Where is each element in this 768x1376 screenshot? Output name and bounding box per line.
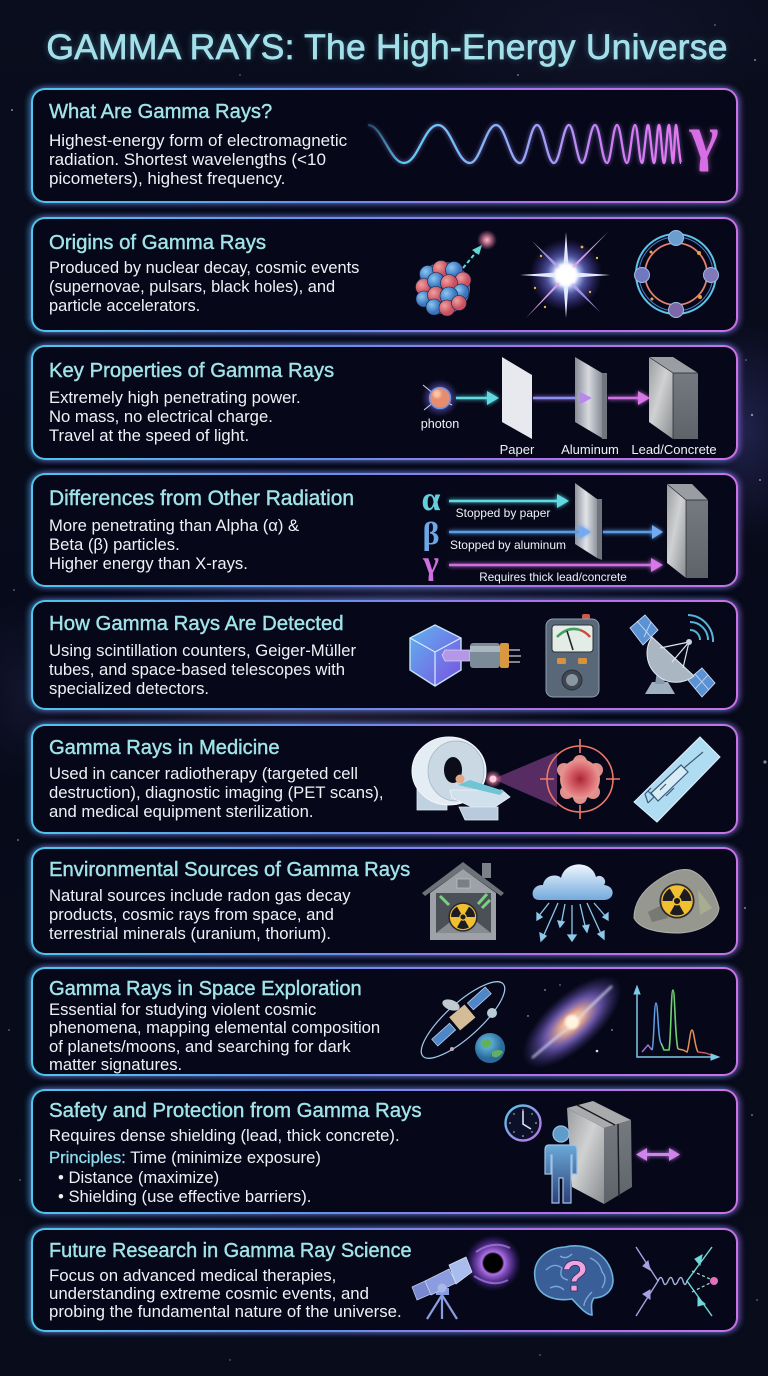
icon: orbiting satellite and earth: [411, 971, 515, 1069]
text: future research: Focus on advanced medical therapies,: [49, 1266, 336, 1284]
alpha ray: Stopped by paper: [456, 506, 550, 520]
beta ray: β: [423, 515, 439, 551]
icon: concrete block: [667, 484, 708, 578]
icon: atomic nucleus: [416, 260, 471, 316]
arrow: through paper: [533, 391, 592, 405]
icon: black hole: [465, 1235, 521, 1291]
gamma ray: γ: [422, 545, 439, 582]
icon: house with radon: [422, 862, 504, 940]
text: principles: Principles: Time (minimize exposure): [49, 1148, 321, 1166]
text: definition: Highest-energy form of electromagnetic: [49, 130, 347, 150]
text: origins: (supernovae, pulsars, black holes), and: [49, 278, 335, 296]
icon: spectrum chart: [634, 986, 719, 1060]
beta ray: Stopped by aluminum: [450, 538, 566, 552]
panel: what are gamma rays: [31, 88, 738, 203]
text: future research: probing the fundamental nature of the universe.: [49, 1302, 402, 1320]
text: future research: understanding extreme cosmic events, and: [49, 1284, 369, 1302]
icon: person: [545, 1126, 577, 1203]
gamma ray: Requires thick lead/concrete: [479, 571, 627, 584]
text: detection: Using scintillation counters, Geiger-Müller: [49, 640, 356, 660]
text: space exploration: matter signatures.: [49, 1055, 182, 1074]
text: space exploration: [49, 1000, 380, 1074]
icon: geiger counter: [546, 614, 599, 697]
text: differences: More penetrating than Alpha (α) &: [49, 516, 299, 534]
text: origins: particle accelerators.: [49, 296, 200, 314]
icon: telescope: [412, 1257, 472, 1319]
text: detection: specialized detectors.: [49, 678, 209, 698]
text: detection: tubes, and space-based telescopes with: [49, 660, 345, 678]
panel: future research: [31, 1228, 738, 1332]
text: differences: [49, 516, 299, 572]
panel: detection: [31, 600, 738, 710]
icon: brain with question mark: [535, 1246, 613, 1315]
icon: particle accelerator ring: [634, 230, 718, 318]
heading: origins: Origins of Gamma Rays: [49, 232, 266, 254]
icon: beam cone: [484, 752, 557, 807]
heading: what are gamma rays: What Are Gamma Rays?: [49, 101, 272, 123]
heading: space exploration: Gamma Rays in Space Exploration: [49, 978, 362, 1000]
text: properties: No mass, no electrical charge.: [49, 406, 273, 426]
text: distance and shielding bullets: • Shielding (use effective barriers).: [58, 1186, 311, 1206]
icon: PET scanner: [412, 737, 510, 820]
panel: key properties: [31, 345, 738, 460]
text: differences: Higher energy than X-rays.: [49, 554, 248, 572]
heading: key properties: Key Properties of Gamma Rays: [49, 360, 334, 382]
icon: aluminum plate: [561, 357, 619, 457]
title: GAMMA RAYS: The High-Energy Universe: [46, 27, 728, 67]
text: environmental: [49, 886, 351, 942]
icon: aluminum plate: Aluminum: [561, 442, 619, 457]
panel: safety: [31, 1089, 738, 1214]
icon: feynman diagram: [636, 1247, 718, 1316]
icon: satellite dish: [630, 615, 715, 697]
icon: gamma symbol: γ: [688, 104, 719, 172]
text: definition: picometers), highest frequency.: [49, 168, 285, 188]
text: origins: [49, 258, 359, 314]
text: distance and shielding bullets: [58, 1168, 311, 1206]
text: space exploration: of planets/moons, and searching for dark: [49, 1037, 351, 1056]
arrow: photon to paper: [456, 391, 499, 405]
icon: paper sheet: [500, 357, 535, 457]
panel: origins: [31, 217, 738, 332]
heading: environmental: Environmental Sources of Gamma Rays: [49, 859, 410, 881]
text: future research: [49, 1266, 402, 1320]
text: environmental: products, cosmic rays from space, and: [49, 904, 334, 924]
panel: medicine: [31, 724, 738, 834]
text: medicine: [49, 764, 384, 820]
icon: sterile syringe pack: [634, 737, 720, 822]
icon: photon: [421, 379, 459, 431]
icon: lead concrete block: Lead/Concrete: [631, 442, 717, 457]
icon: brain with question mark: ?: [562, 1252, 588, 1301]
text: space exploration: phenomena, mapping elemental composition: [49, 1018, 380, 1037]
panel: environmental: [31, 847, 738, 955]
text: properties: Extremely high penetrating power.: [49, 388, 301, 406]
icon: chirped gamma wave: [368, 125, 681, 163]
text: detection: [49, 640, 356, 698]
text: environmental: terrestrial minerals (uranium, thorium).: [49, 924, 331, 942]
heading: differences: Differences from Other Radiation: [49, 487, 354, 510]
icon: paper sheet: Paper: [500, 442, 535, 457]
icon: tumour target: [540, 739, 620, 819]
icon: cloud with cosmic rays: [533, 864, 613, 941]
text: definition: [49, 130, 347, 188]
panel: space exploration: [31, 967, 738, 1076]
text: properties: [49, 388, 301, 444]
icon: radioactive rock: [634, 869, 719, 933]
text: environmental: Natural sources include radon gas decay: [49, 886, 351, 904]
text: distance and shielding bullets: • Distance (maximize): [58, 1168, 219, 1186]
heading: medicine: Gamma Rays in Medicine: [49, 737, 280, 759]
icon: photon: photon: [421, 417, 459, 431]
icon: lead concrete block: [631, 357, 717, 457]
arrow: through aluminum: [608, 391, 650, 405]
text: medicine: destruction), diagnostic imaging (PET scans),: [49, 782, 384, 802]
icon: aluminum plate: [575, 483, 602, 560]
text: definition: radiation. Shortest wavelengths (<10: [49, 150, 326, 168]
alpha ray: [422, 481, 569, 520]
alpha ray: α: [422, 481, 441, 518]
beta ray: [423, 515, 663, 552]
icon: clock: [506, 1106, 540, 1140]
text: shielding requirement: Requires dense shielding (lead, thick concrete).: [49, 1126, 400, 1144]
gamma ray: [422, 545, 663, 584]
icon: supernova burst: [520, 232, 610, 318]
icon: emitted particle arrow: [463, 230, 497, 268]
icon: layered shield wall: [567, 1101, 632, 1204]
text: medicine: and medical equipment sterilization.: [49, 802, 314, 820]
text: space exploration: Essential for studying violent cosmic: [49, 1000, 316, 1019]
arrow: distance double arrow: [636, 1148, 680, 1161]
heading: future research: Future Research in Gamma Ray Science: [49, 1240, 412, 1262]
heading: detection: How Gamma Rays Are Detected: [49, 613, 344, 635]
text: differences: Beta (β) particles.: [49, 534, 180, 554]
heading: safety: Safety and Protection from Gamma Rays: [49, 1099, 422, 1122]
icon: scintillation crystal and tube: [410, 625, 521, 686]
icon: galaxy: [508, 960, 636, 1084]
text: origins: Produced by nuclear decay, cosmic events: [49, 258, 359, 276]
text: properties: Travel at the speed of light.: [49, 426, 249, 444]
panel: differences: [31, 473, 738, 587]
text: medicine: Used in cancer radiotherapy (targeted cell: [49, 764, 358, 782]
